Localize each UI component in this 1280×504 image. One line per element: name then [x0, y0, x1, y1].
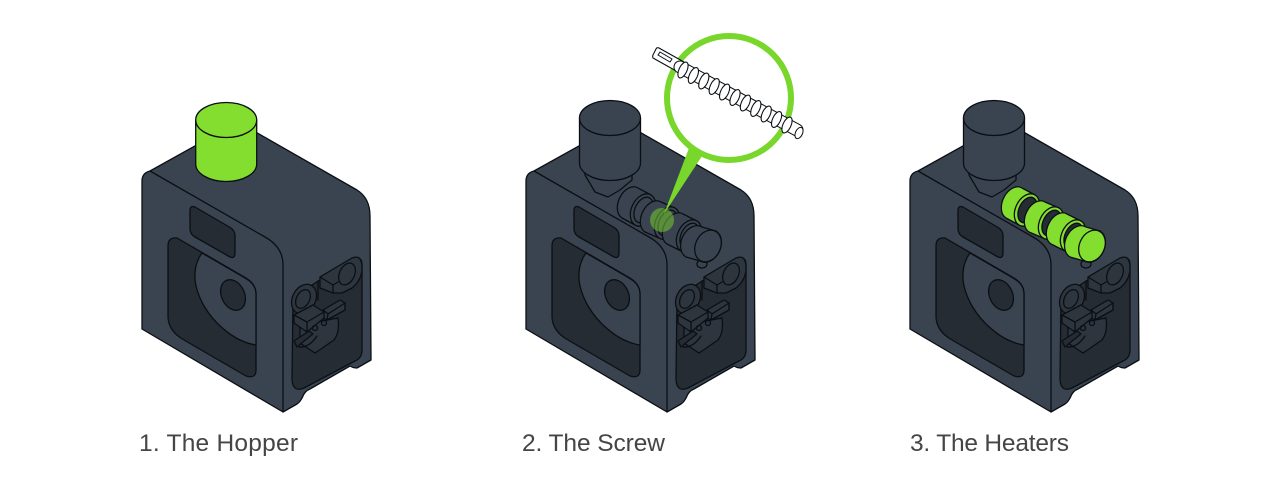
machine 3: the heaters [910, 100, 1139, 412]
dark screw housing [617, 187, 726, 268]
machine 1: the hopper [142, 102, 371, 412]
green hopper [196, 102, 257, 182]
label: the screw: 2. The Screw [522, 430, 665, 457]
callout tail [664, 148, 704, 214]
green heaters [1001, 187, 1110, 268]
label: the heaters: 3. The Heaters [910, 430, 1069, 457]
label: the hopper: 1. The Hopper [139, 430, 298, 457]
highlight spot [650, 208, 674, 232]
callout circle [667, 36, 791, 160]
icon: screw [653, 48, 805, 140]
callout: magnified screw [650, 36, 805, 232]
machine 2: the screw [526, 100, 755, 412]
